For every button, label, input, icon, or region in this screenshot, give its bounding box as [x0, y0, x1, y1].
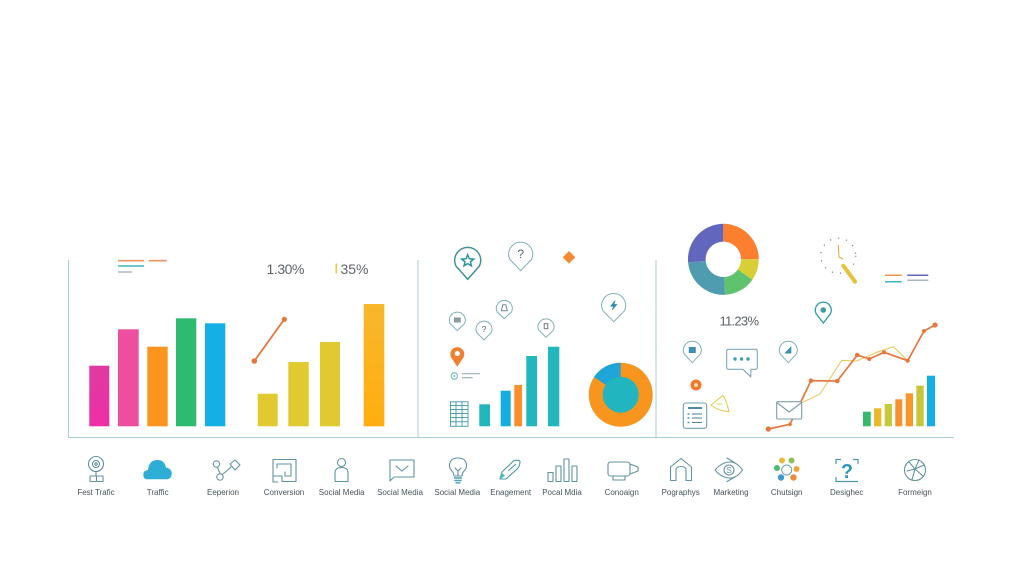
bar chart: multicolour bars [89, 318, 225, 426]
percentage label 11.23%: 11.23% [720, 314, 759, 328]
panel: middle icons and charts [449, 242, 653, 427]
donut chart: five segments [688, 224, 759, 295]
item: Pocal Mdia [542, 459, 582, 497]
icon: orange diamond [563, 251, 575, 264]
icon: small pin question: ? [482, 324, 487, 334]
bar chart: rising colourful bars [863, 376, 935, 426]
icon: orange location pin [450, 347, 464, 367]
item: Chutsign: Chutsign [771, 488, 802, 497]
item: Social Media (message): Social Media [377, 488, 423, 497]
icon: envelope [777, 402, 802, 419]
icon: clipboard [683, 403, 707, 428]
bar chart: yellow bars [258, 304, 384, 426]
item: Social Media (bulb): Social Media [434, 488, 481, 497]
item: Formeign: Formeign [898, 488, 932, 497]
item: Pocal Mdia: Pocal Mdia [542, 488, 582, 497]
icon: star pin [455, 247, 481, 279]
icon row with labels [77, 456, 932, 497]
icon: small pin bell [496, 300, 512, 319]
item: Marketing: S [726, 466, 732, 475]
item: Enagement [490, 460, 532, 497]
item: Marketing [713, 458, 749, 497]
icon: teal pin [815, 302, 831, 323]
item: Desighec [830, 460, 863, 497]
item: Eeperion [207, 460, 240, 497]
icon: question pin: ? [517, 247, 524, 261]
panel: right icons and charts [683, 224, 938, 432]
icon: small pin calendar [449, 312, 465, 331]
item: Pographys: Pographys [662, 488, 700, 497]
item: Pographys [662, 458, 700, 497]
icon: triangle pin [779, 341, 797, 363]
icon: table [450, 402, 468, 426]
percentage label 35%: 35% [340, 261, 368, 277]
item: Chutsign [771, 458, 802, 497]
legend lines [118, 261, 167, 272]
icon: question pin [509, 242, 533, 271]
item: Traffic: Traffic [147, 488, 169, 497]
item: Fest Trafic: Fest Trafic [77, 488, 115, 497]
item: Conoaign [605, 462, 639, 497]
item: Marketing: Marketing [713, 488, 749, 497]
percentage label 1.30%: 1.30% [266, 261, 304, 277]
item: Formeign [898, 460, 932, 497]
icon: document pin [683, 341, 701, 363]
icon: orange badge [690, 380, 702, 390]
item: Fest Trafic [77, 456, 115, 497]
item: Conversion: Conversion [264, 488, 304, 497]
small legend with icon [451, 373, 480, 379]
item: Eeperion: Eeperion [207, 488, 239, 497]
trend line segment [252, 317, 287, 364]
line chart: orange and yellow trends [766, 322, 938, 432]
item: Conoaign: Conoaign [605, 488, 639, 497]
item: Desighec: Desighec [830, 488, 863, 497]
item: Social Media (bulb) [434, 458, 481, 497]
icon: megaphone bell [711, 396, 729, 412]
panel: left bar charts [89, 261, 384, 426]
icon: bolt pin [602, 293, 626, 322]
icon: small pin question [476, 321, 492, 340]
item: Enagement: Enagement [490, 488, 532, 497]
donut chart: orange, blue and teal [589, 363, 653, 427]
item: Social Media (person) [319, 458, 365, 497]
icon: speech bubble [727, 349, 757, 377]
item: Desighec: ? [841, 461, 853, 483]
item: Conversion [264, 460, 304, 497]
item: Social Media (message) [377, 460, 423, 497]
panel frame: axes and dividers [68, 260, 954, 438]
icon: clock with magnifier handle [821, 238, 856, 282]
legend lines [885, 275, 928, 282]
icon: small pin note [538, 319, 554, 337]
item: Traffic [143, 460, 172, 497]
bar chart: teal and blue bars [479, 347, 559, 426]
item: Social Media (person): Social Media [319, 488, 365, 497]
